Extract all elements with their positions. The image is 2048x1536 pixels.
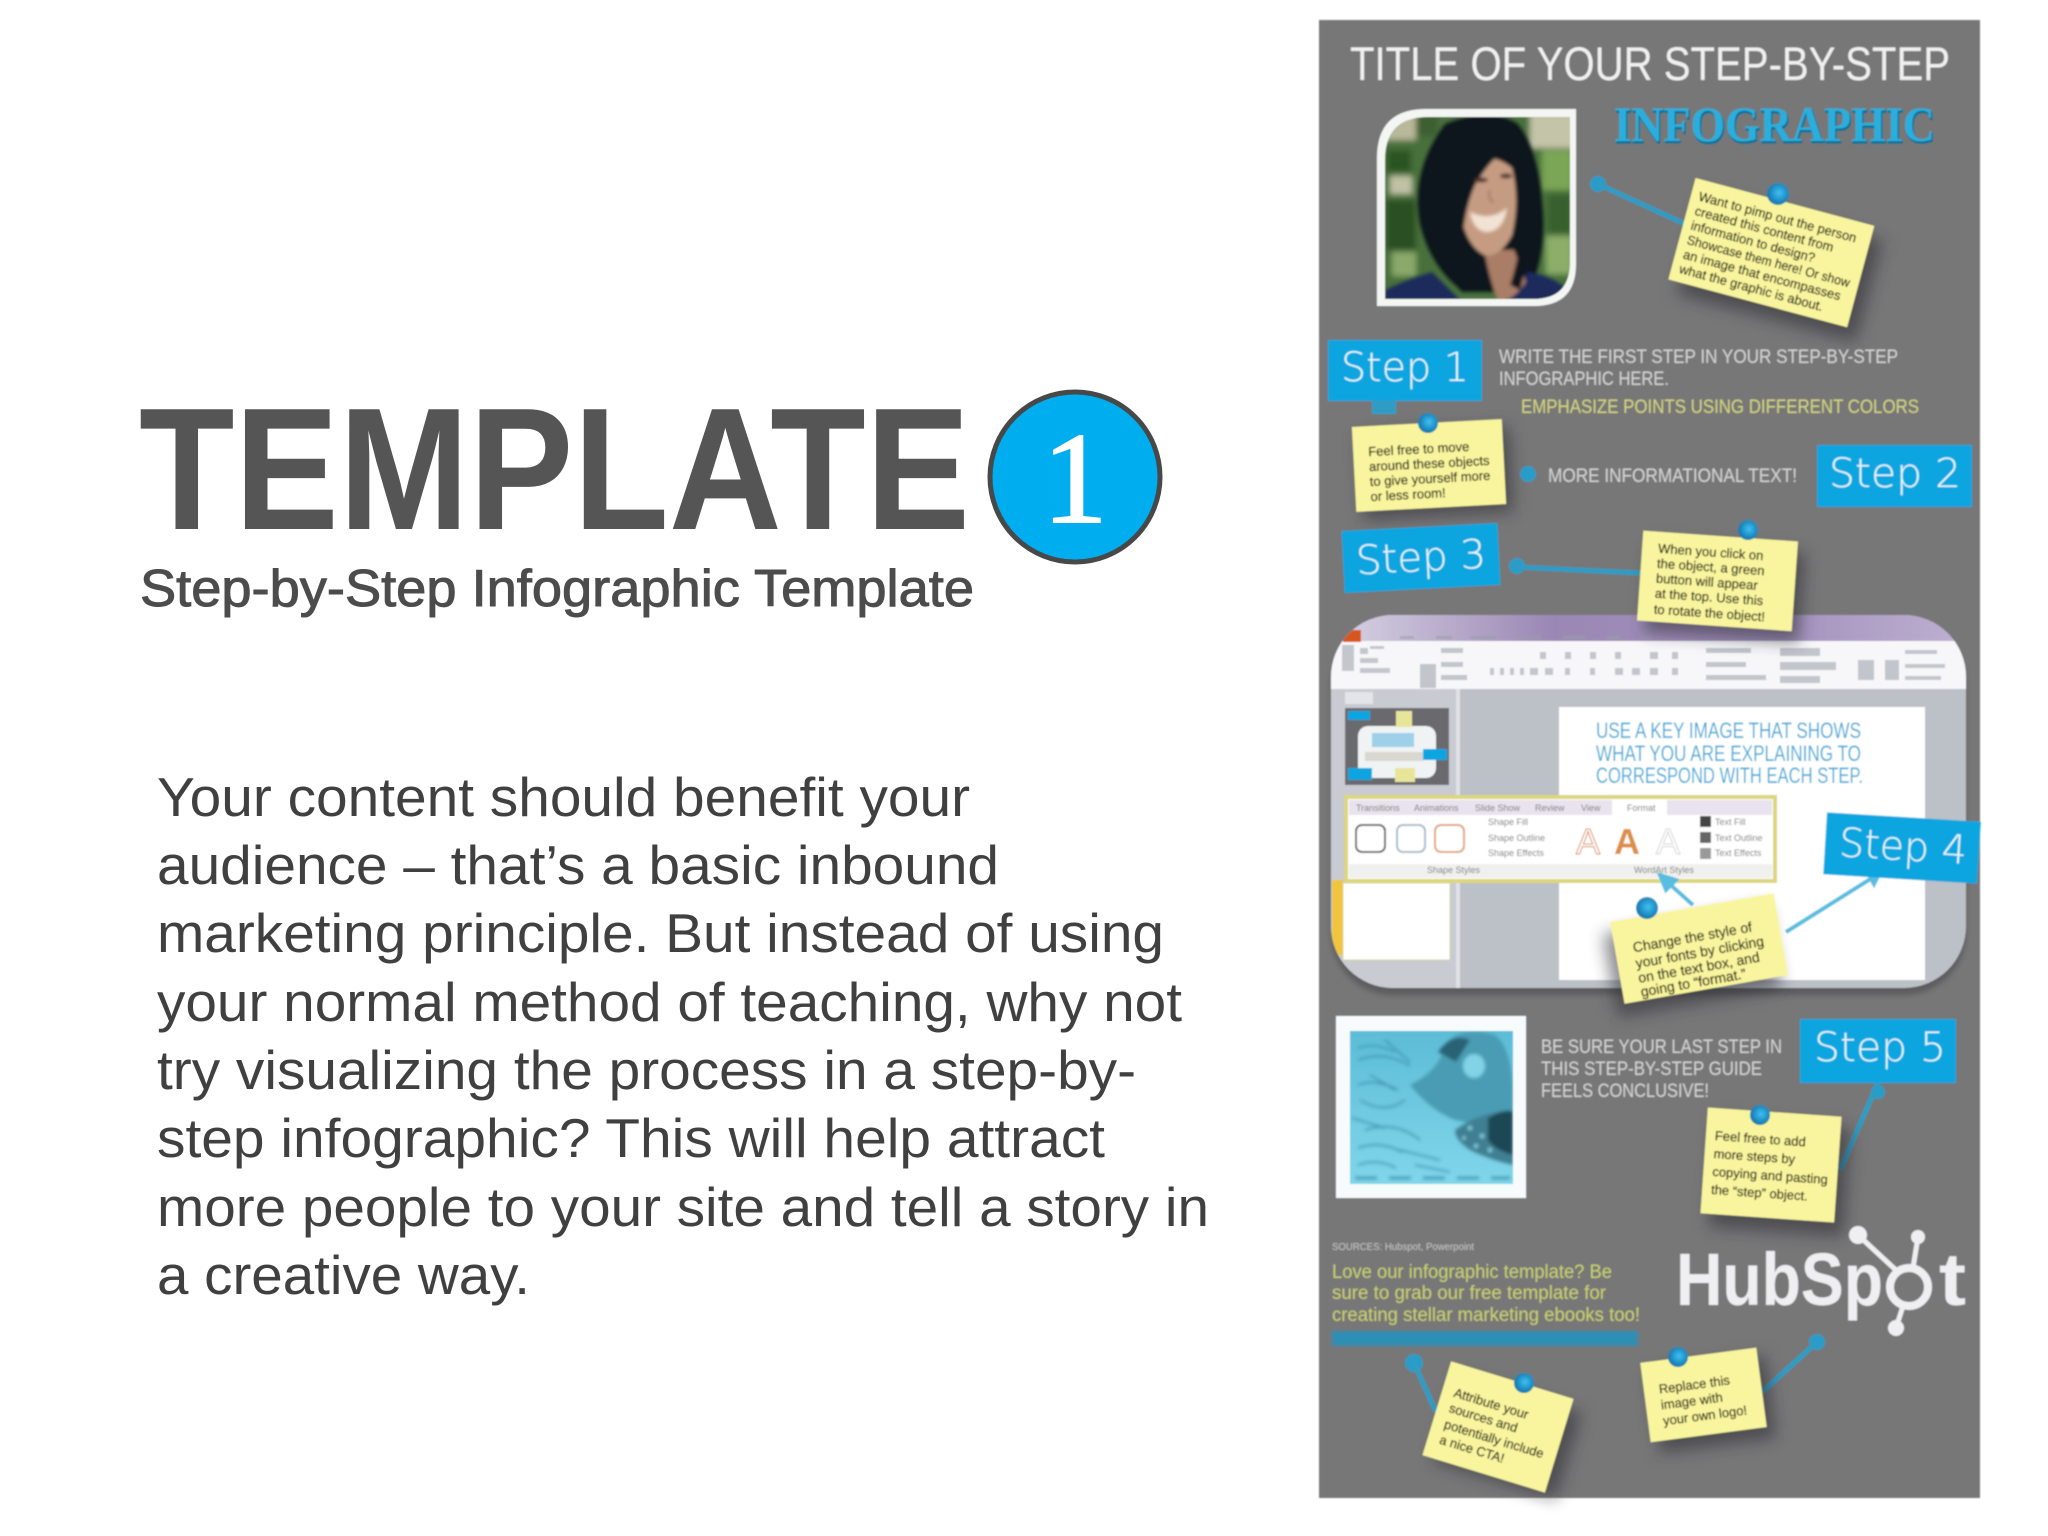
format ribbon callout: Text Fill [1715, 817, 1746, 827]
infographic title: TITLE OF YOUR STEP-BY-STEP [1350, 37, 1950, 90]
sticky note: replace logo [1640, 1347, 1776, 1454]
format ribbon callout: A [1576, 821, 1600, 862]
step 2 text with dot: MORE INFORMATIONAL TEXT! [1548, 466, 1797, 487]
step 1 text: WRITE THE FIRST STEP IN YOUR STEP-BY-STEP [1499, 347, 1898, 368]
format ribbon callout [1346, 797, 1775, 881]
format ribbon callout: A [1656, 821, 1680, 862]
format ribbon callout: Text Effects [1715, 848, 1762, 858]
text block: description: marketing principle. But instead of using [157, 902, 1164, 964]
slide canvas: WHAT YOU ARE EXPLAINING TO [1596, 741, 1861, 766]
sticky note: add more steps: Feel free to add [1714, 1128, 1806, 1149]
sticky note: move objects [1352, 413, 1514, 520]
format ribbon callout: Format [1627, 803, 1656, 813]
step 3 badge [1341, 523, 1501, 593]
sticky note: change style of fonts: going to “format.” [1639, 965, 1747, 1000]
sticky note: attribute sources: a nice CTA! [1438, 1432, 1506, 1466]
connector: link to attribute note [1405, 1354, 1436, 1412]
call to action text [1332, 1262, 1640, 1326]
text block: description: try visualizing the process in a step-by- [157, 1039, 1136, 1101]
step 5 text [1541, 1037, 1782, 1102]
format ribbon callout: Review [1535, 803, 1565, 813]
sticky note: attribute sources [1422, 1361, 1585, 1499]
text block: description: more people to your site and tell a story in [157, 1176, 1209, 1238]
slide canvas: CORRESPOND WITH EACH STEP. [1596, 763, 1863, 788]
text block: description: Your content should benefit your [157, 766, 970, 828]
step 1 text: INFOGRAPHIC HERE. [1499, 369, 1669, 390]
connector: logo to note [1762, 1334, 1825, 1392]
sticky note: move objects: or less room! [1370, 485, 1446, 504]
thumbnail slide 1 [1345, 708, 1449, 785]
badge: number 1: 1 [1042, 407, 1108, 551]
sticky note: when you click: button will appear [1656, 571, 1759, 593]
sticky note: add more steps: copying and pasting [1712, 1164, 1828, 1187]
subtitle: Step-by-Step Infographic Template [140, 560, 974, 618]
step 1 text [1499, 347, 1898, 390]
sticky note: add more steps [1700, 1105, 1852, 1236]
sticky note: pimp out the person [1665, 178, 1886, 342]
arrows from format note [1660, 872, 1880, 932]
format ribbon callout: A [1614, 821, 1640, 862]
format ribbon callout: Shape Outline [1488, 833, 1545, 843]
step 5 badge [1800, 1019, 1956, 1170]
text block: description: step infographic? This will help attract [157, 1107, 1105, 1169]
call to action link [1332, 1331, 1638, 1346]
step 4 badge [1823, 812, 1981, 884]
step 3 badge: Step 3 [1355, 532, 1487, 584]
format ribbon callout: Shape Styles [1427, 865, 1481, 875]
sticky note: pimp out the person: what the graphic is about. [1677, 261, 1825, 314]
sticky note: move objects: around these objects [1369, 453, 1490, 474]
sticky note: replace logo: image with [1660, 1390, 1724, 1413]
emphasis text: EMPHASIZE POINTS USING DIFFERENT COLORS [1521, 397, 1919, 418]
heading: TEMPLATE: TEMPLATE [139, 371, 970, 566]
sticky note: pimp out the person: Showcase them here! Or show [1685, 232, 1852, 290]
infographic subtitle: INFOGRAPHIC [1614, 96, 1935, 152]
sticky note: when you click: When you click on [1658, 541, 1764, 563]
slide canvas: USE A KEY IMAGE THAT SHOWS [1596, 718, 1861, 743]
logo: HubSpot: t [1939, 1238, 1966, 1321]
step 4 badge: Step 4 [1838, 820, 1968, 874]
call to action text: creating stellar marketing ebooks too! [1332, 1305, 1640, 1326]
logo: HubSpot: HubSp [1676, 1238, 1883, 1321]
format ribbon callout: Animations [1414, 803, 1459, 813]
bangs [1457, 154, 1498, 293]
sticky note: when you click: to rotate the object! [1653, 602, 1765, 624]
sticky note: move objects: to give yourself more [1369, 468, 1491, 489]
thumbnail slide 3 [1332, 880, 1450, 960]
badge: number 1 [990, 392, 1160, 562]
connector: photo to note [1590, 176, 1685, 224]
panel: step-by-step infographic preview [1319, 20, 1981, 1499]
sticky note: add more steps: more steps by [1713, 1146, 1796, 1167]
sticky note: change style of fonts: Change the style of [1632, 919, 1753, 955]
step 5 badge: Step 5 [1814, 1025, 1946, 1071]
sticky note: attribute sources: potentially include [1442, 1417, 1546, 1461]
sticky note: attribute sources: Attribute your [1452, 1385, 1531, 1422]
sticky note: when you click [1636, 520, 1806, 643]
photo: author portrait [1377, 109, 1576, 306]
format ribbon callout: WordArt Styles [1634, 865, 1694, 875]
format ribbon callout: Shape Fill [1488, 817, 1528, 827]
logo: HubSpot [1676, 1226, 1966, 1336]
sticky note: replace logo: Replace this [1658, 1372, 1731, 1397]
format ribbon callout: Text Outline [1715, 833, 1763, 843]
step 2 badge [1817, 445, 1972, 507]
key image: PowerPoint screenshot [1331, 615, 1966, 995]
step 5 text: BE SURE YOUR LAST STEP IN [1541, 1037, 1782, 1058]
step 1 badge [1328, 340, 1482, 414]
sticky note: pimp out the person: information to design? [1689, 218, 1817, 265]
text block: description: audience – that’s a basic inbound [157, 834, 999, 896]
sticky note: pimp out the person: an image that encompasses [1682, 247, 1843, 303]
sticky note: pimp out the person: Want to pimp out the person [1697, 189, 1858, 245]
sticky note: change style of fonts [1601, 893, 1790, 1017]
infographic subtitle: INFOGRAPHIC [1615, 98, 1936, 154]
back hair [1418, 115, 1544, 292]
sources line: SOURCES: Hubspot, Powerpoint [1332, 1241, 1474, 1253]
call to action text: sure to grab our free template for [1332, 1283, 1607, 1304]
step 5 text: FEELS CONCLUSIVE! [1541, 1081, 1709, 1102]
sticky note: attribute sources: sources and [1447, 1400, 1520, 1435]
format ribbon callout: Shape Effects [1488, 848, 1544, 858]
smile [1470, 208, 1507, 232]
sticky note: pimp out the person: created this content from [1693, 203, 1835, 255]
sticky note: when you click: at the top. Use this [1654, 586, 1764, 608]
text block: description: your normal method of teaching, why not [157, 971, 1182, 1033]
call to action text: Love our infographic template? Be [1332, 1262, 1612, 1283]
text block: description: a creative way. [157, 1244, 530, 1306]
text block: description [157, 766, 1209, 1306]
sticky note: when you click: the object, a green [1657, 556, 1765, 578]
image: hand on map [1336, 1016, 1526, 1198]
format ribbon callout: Transitions [1356, 803, 1400, 813]
format ribbon callout: Slide Show [1475, 803, 1521, 813]
step 2 badge: Step 2 [1829, 451, 1961, 497]
sticky note: change style of fonts: on the text box, and [1637, 949, 1761, 986]
step 5 text: THIS STEP-BY-STEP GUIDE [1541, 1059, 1762, 1080]
slide canvas [1559, 707, 1925, 980]
sticky note: move objects: Feel free to move [1368, 439, 1470, 459]
format ribbon callout: View [1581, 803, 1601, 813]
sticky note: add more steps: the “step” object. [1711, 1182, 1808, 1204]
sticky note: replace logo: your own logo! [1662, 1402, 1748, 1428]
step 1 badge: Step 1 [1341, 345, 1469, 391]
sticky note: change style of fonts: your fonts by clicking [1634, 933, 1765, 971]
connector: step 3 to note [1509, 558, 1640, 574]
